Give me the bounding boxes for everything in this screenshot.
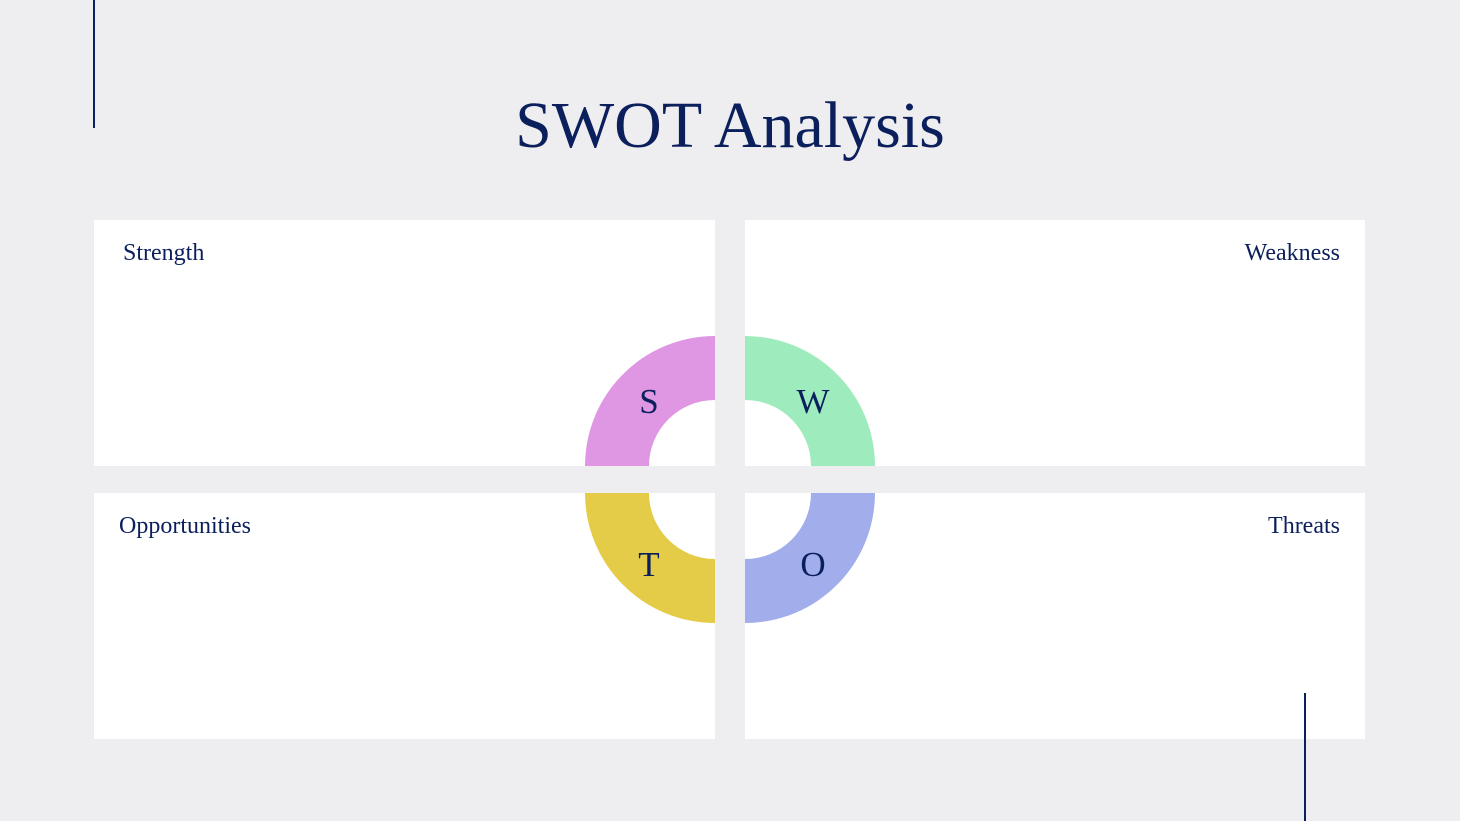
quarter O [745,493,875,623]
panel: threats [745,493,1365,739]
quarter W: W [796,382,830,421]
title: SWOT Analysis [515,89,945,162]
accent line bottom-right [1304,693,1306,821]
quarter T: T [638,545,660,584]
label: strength: Strength [123,240,204,266]
quarter T [585,493,715,623]
panel: weakness [745,220,1365,466]
label: opportunities: Opportunities [119,513,251,539]
quarter O: O [800,545,826,584]
label: threats: Threats [1268,513,1340,539]
quarter W [745,336,875,466]
accent line top-left [93,0,95,128]
panel: opportunities [94,493,715,739]
quarter S [585,336,715,466]
panel: strength [94,220,715,466]
label: weakness: Weakness [1245,240,1340,266]
quarter S: S [639,382,659,421]
